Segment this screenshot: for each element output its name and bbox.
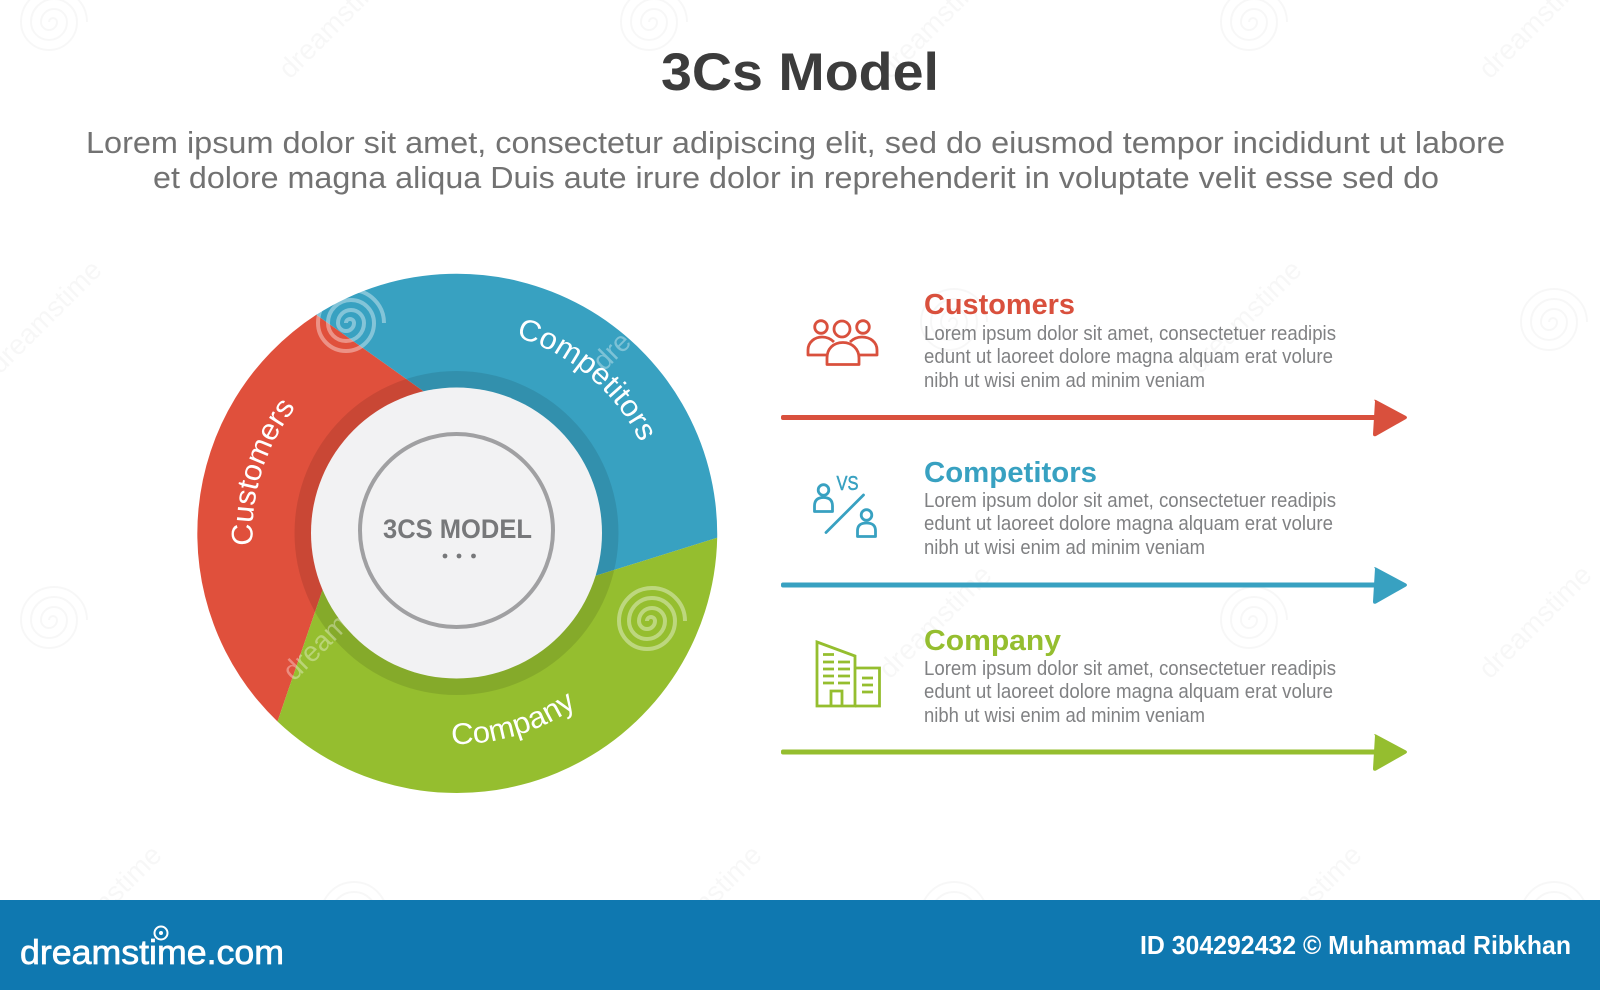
centre disc xyxy=(311,388,602,678)
heading: Customers xyxy=(924,289,1075,321)
heading: Competitors xyxy=(924,457,1097,489)
segment: customers xyxy=(197,315,440,722)
watermark pattern: dreamstime xyxy=(1472,559,1598,684)
title: 3Cs Model xyxy=(661,43,939,102)
centre dots xyxy=(443,554,476,558)
watermark pattern: dreamstime xyxy=(642,839,768,964)
row: customers xyxy=(781,289,1407,436)
subtitle text: et dolore magna aliqua Duis aute irure dolor in reprehenderit in voluptate velit esse sed do xyxy=(153,160,1439,195)
footer credit: ID 304292432 © Muhammad Ribkhan xyxy=(1140,930,1571,960)
footer band xyxy=(0,900,1600,990)
label: competitors: Competitors xyxy=(520,320,652,440)
body text: nibh ut wisi enim ad minim veniam xyxy=(924,537,1205,559)
watermark pattern: dreamstime xyxy=(1182,254,1308,379)
icon: people xyxy=(808,321,877,364)
body text: Lorem ipsum dolor sit amet, consectetuer readipis xyxy=(924,490,1336,512)
row: competitors xyxy=(781,457,1407,604)
body text xyxy=(924,490,1336,559)
arrow xyxy=(781,400,1407,436)
row: company xyxy=(781,625,1407,771)
label: company: Company xyxy=(452,693,572,744)
body text: nibh ut wisi enim ad minim veniam xyxy=(924,705,1205,727)
body text: Lorem ipsum dolor sit amet, consectetuer readipis xyxy=(924,323,1336,345)
segment: competitors xyxy=(316,274,717,580)
watermark on chart xyxy=(276,290,685,686)
icon: vs people: VS xyxy=(836,473,858,495)
body text: edunt ut laoreet dolore magna alquam erat volure xyxy=(924,346,1333,368)
footer logo: dreamstime.com xyxy=(20,934,284,972)
subtitle text: Lorem ipsum dolor sit amet, consectetur adipiscing elit, sed do eiusmod tempor incididunt ut labore xyxy=(86,125,1505,160)
segment: company xyxy=(278,538,717,793)
centre label: 3CS MODEL xyxy=(383,514,532,544)
arrow xyxy=(781,567,1407,604)
watermark pattern: dreamstime xyxy=(872,559,998,684)
donut chart: 3Cs xyxy=(197,274,718,793)
subtitle text xyxy=(86,125,1505,195)
icon: buildings xyxy=(817,642,880,706)
icon: vs people xyxy=(814,473,876,536)
body text: Lorem ipsum dolor sit amet, consectetuer readipis xyxy=(924,658,1336,680)
body text: nibh ut wisi enim ad minim veniam xyxy=(924,370,1205,392)
arrow xyxy=(781,734,1407,771)
watermark on chart: dream xyxy=(276,608,354,686)
body text xyxy=(924,658,1336,727)
inner shadow ring xyxy=(294,371,618,695)
body text: edunt ut laoreet dolore magna alquam erat volure xyxy=(924,513,1333,535)
watermark on chart: dream xyxy=(586,298,664,376)
watermark pattern: dreamstime xyxy=(1242,839,1368,964)
watermark pattern: dreamstime xyxy=(42,839,168,964)
body text: edunt ut laoreet dolore magna alquam erat volure xyxy=(924,681,1333,703)
centre ring xyxy=(360,434,553,627)
heading: Company xyxy=(924,625,1061,657)
body text xyxy=(924,323,1336,392)
label: customers: Customers xyxy=(232,400,294,544)
